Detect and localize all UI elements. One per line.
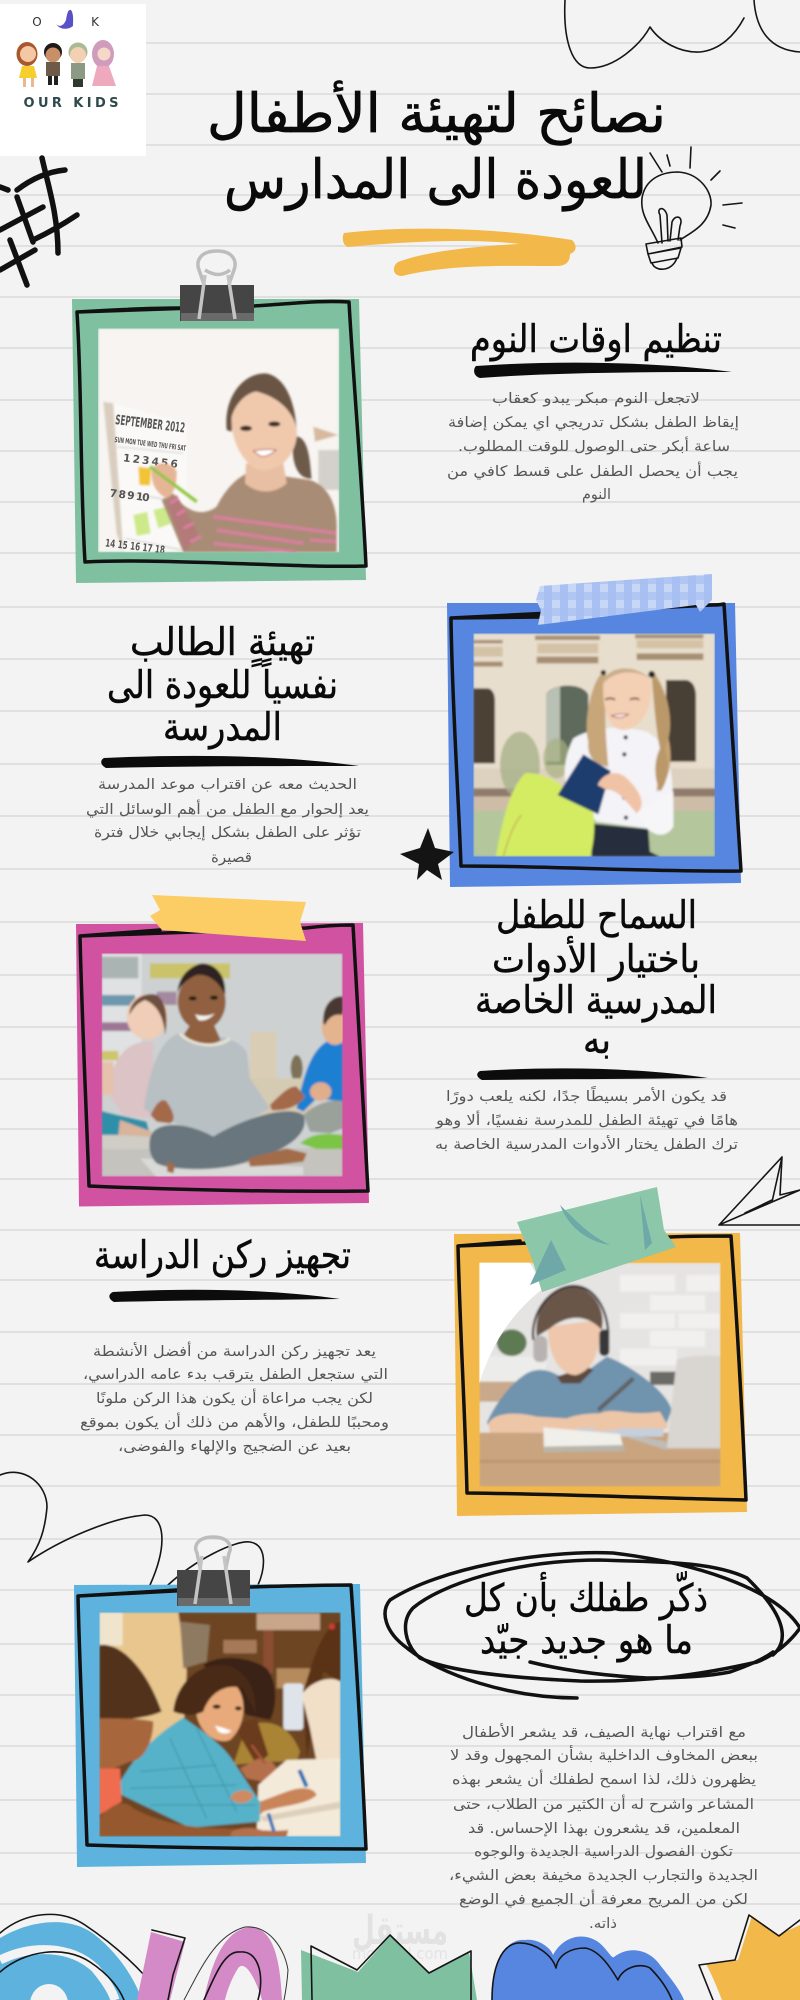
body copy: قد يكون الأمر بسيطًا جدًا، لكنه يلعب دورًا	[446, 1086, 727, 1105]
heading: تجهيز ركن الدراسة	[94, 1233, 351, 1278]
title	[207, 80, 666, 211]
logo: Our Kids	[0, 4, 146, 156]
panel: sleep schedule photo card	[72, 251, 366, 583]
brush underline	[474, 363, 732, 378]
shape: pink arch	[184, 1927, 288, 2000]
frame: blue	[447, 603, 741, 887]
body copy: إيقاظ الطفل بشكل تدريجي اي يمكن إضافة	[448, 415, 739, 431]
photo: kids meditating	[102, 953, 348, 1177]
heading: السماح للطفل	[496, 893, 697, 937]
body copy: تكون الفصول الدراسية الجديدة والوجوه	[474, 1844, 733, 1860]
scribble frame	[77, 301, 366, 566]
logo: Our Kids: K	[91, 15, 100, 29]
heading: المدرسية الخاصة	[475, 978, 717, 1022]
icon: hash scribble	[0, 158, 77, 285]
body copy: هامًا في تهيئة الطفل للمدرسة نفسيًا، ألا وهو	[435, 1110, 738, 1129]
title: للعودة الى المدارس	[224, 148, 647, 211]
shape: blue cloud	[492, 1936, 684, 2000]
scribble frame	[78, 1585, 366, 1849]
heading: المدرسة	[163, 705, 282, 749]
photo: girl with backpack	[473, 633, 715, 857]
photo: girl marking calendar: 14 15 16 17 18	[105, 536, 166, 557]
watermark	[352, 1908, 448, 1963]
heading: باختيار الأدوات	[492, 935, 700, 982]
photo: kids drawing at table	[99, 1612, 341, 1837]
icon: star	[400, 828, 454, 880]
icon: binder clip	[180, 251, 254, 321]
frame: light blue	[74, 1584, 366, 1867]
decoration: bottom shapes	[0, 1914, 800, 2000]
panel: study corner photo card	[454, 1187, 747, 1516]
body copy: ذاته.	[589, 1916, 617, 1932]
shape: yellow star	[699, 1915, 800, 2000]
brush underline	[109, 1290, 340, 1302]
photo: girl marking calendar: SUN MON TUE WED THU FRI SAT	[114, 435, 186, 453]
body copy	[449, 1723, 758, 1932]
photo: child studying with headphones	[479, 1263, 721, 1487]
body copy	[447, 391, 739, 503]
title: نصائح لتهيئة الأطفال	[207, 80, 666, 146]
logo: Our Kids: OUR KIDS	[24, 96, 118, 111]
frame: pink	[76, 923, 369, 1206]
body copy	[435, 1086, 738, 1153]
icon: binder clip	[177, 1537, 250, 1606]
body copy: لكن يجب مراعاة أن يكون هذا الركن ملونًا	[96, 1388, 373, 1407]
icon: four kids	[16, 40, 116, 87]
body copy: تؤثر على الطفل بشكل إيجابي خلال فترة	[94, 825, 361, 841]
icon: paper airplane	[719, 1157, 800, 1225]
body copy: يجب أن يحصل الطفل على قسط كافي من	[447, 461, 738, 480]
heading: به	[583, 1018, 611, 1062]
icon: bird	[56, 10, 73, 29]
watermark: mostaql.com	[352, 1944, 448, 1963]
washi tape: yellow	[150, 895, 306, 941]
body copy: مع اقتراب نهاية الصيف، قد يشعر الأطفال	[462, 1723, 746, 1741]
body copy: لكن من المريح معرفة أن الجميع في الوضع	[459, 1889, 748, 1908]
photo: girl marking calendar: 7 8 9 10	[109, 487, 150, 504]
scribble frame	[80, 925, 368, 1191]
body copy: الجديدة والتجارب الجديدة مخيفة بعض الشيء،	[449, 1868, 758, 1884]
body copy: يعد تجهيز ركن الدراسة من أفضل الأنشطة	[93, 1341, 376, 1360]
panel: school supplies photo card	[76, 895, 369, 1206]
body copy: ترك الطفل يختار الأدوات المدرسية الخاصة به	[435, 1135, 738, 1153]
body copy: ومحببًا للطفل، والأهم من ذلك أن يكون بموقع	[80, 1412, 389, 1431]
body copy: ساعة أبكر حتى الوصول للوقت المطلوب.	[458, 436, 730, 455]
scribble frame	[451, 604, 741, 871]
photo: girl marking calendar: SEPTEMBER 2012	[114, 413, 186, 436]
brush underline	[101, 756, 359, 768]
body copy: بعيد عن الضجيج والإلهاء والفوضى،	[118, 1439, 351, 1455]
heading: ذكّر طفلك بأن كل	[464, 1571, 708, 1621]
heading	[475, 893, 717, 1062]
logo: Our Kids: O	[32, 15, 42, 29]
frame: orange	[454, 1233, 747, 1516]
panel: new is good photo card	[74, 1537, 366, 1867]
heading: نفسياً للعودة الى	[107, 658, 338, 708]
body copy: يعد إلحوار مع الطفل من أهم الوسائل التي	[86, 799, 369, 818]
body copy: النوم	[582, 487, 611, 503]
body copy: لاتجعل النوم مبكر يبدو كعقاب	[492, 391, 700, 407]
shape: pink bar	[137, 1930, 185, 2000]
heading	[107, 620, 338, 749]
washi tape: gingham	[536, 574, 712, 625]
body copy: ببعض المخاوف الداخلية بشأن المجهول وقد لا	[450, 1745, 758, 1764]
heading: ما هو جديد جيّد	[480, 1618, 693, 1663]
brush stroke: title underline	[343, 229, 576, 276]
heading: تنظيم اوقات النوم	[470, 317, 722, 362]
scribble ellipse	[385, 1553, 800, 1698]
body copy: الحديث معه عن اقتراب موعد المدرسة	[98, 777, 357, 793]
body copy: التي ستجعل الطفل يترقب بدء عامه الدراسي،	[83, 1367, 388, 1383]
body copy: قصيرة	[211, 850, 252, 866]
body copy: المشاعر واشرح له أن الكثير من الطلاب، حتى	[453, 1794, 754, 1813]
photo: girl marking calendar	[98, 328, 339, 558]
shape: blue swirl	[0, 1914, 146, 2000]
heading: تهيئةٍ الطالب	[130, 620, 315, 668]
body copy: المعلمين، قد يشعرون بهذا الإحساس. قد	[468, 1821, 740, 1837]
heading	[464, 1571, 708, 1663]
body copy	[80, 1341, 389, 1455]
text block: sleep schedule	[447, 317, 739, 503]
body copy	[86, 777, 369, 866]
text block: study corner	[80, 1233, 389, 1455]
text block: school supplies	[435, 893, 738, 1153]
panel: emotional preparation photo card	[400, 574, 741, 887]
frame: green	[72, 299, 366, 583]
shape: green crown	[301, 1935, 477, 2000]
text block: new is good	[385, 1553, 800, 1932]
scribble: top right loops	[565, 0, 800, 68]
text block: emotional preparation	[86, 620, 369, 866]
scribble frame	[458, 1236, 746, 1500]
brush underline	[477, 1068, 708, 1080]
icon: light bulb	[642, 147, 742, 269]
photo: girl marking calendar: 1 2 3 4 5 6	[122, 451, 179, 471]
washi tape: green	[517, 1187, 676, 1292]
watermark: مستقل	[352, 1908, 448, 1954]
scribble: speech bubble curve	[0, 1472, 263, 1585]
body copy: يظهرون ذلك، لذا اسمح لطفلك أن يشعر بهذه	[452, 1769, 756, 1788]
